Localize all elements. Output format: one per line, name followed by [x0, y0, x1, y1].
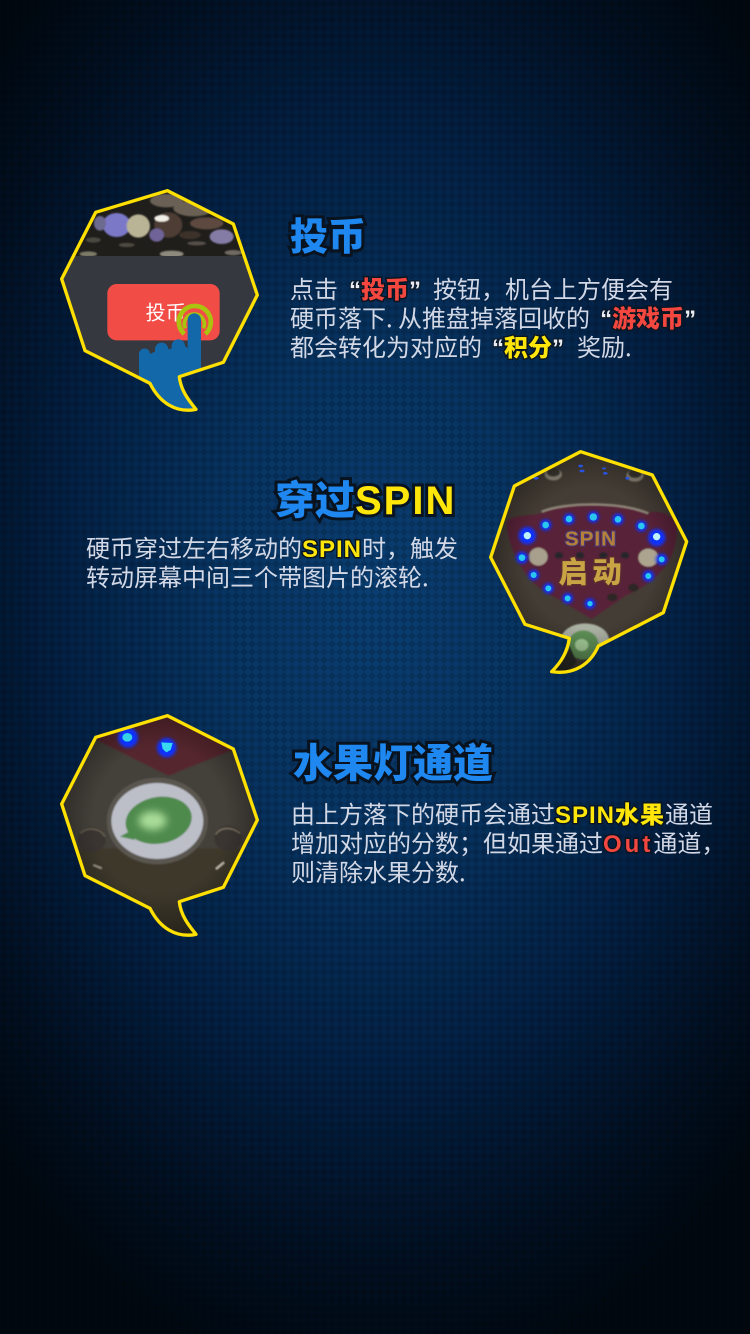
text block: 投币 description: [290, 270, 696, 363]
text block: SPIN description: 转动屏幕中间三个带图片的滚轮.: [86, 558, 429, 593]
bubble 3: fruit lamp photo: [60, 714, 259, 937]
text block: 投币 description: 硬币落下. 从推盘掉落回收的 “游戏币”: [290, 299, 696, 334]
bubble outline: [491, 452, 687, 672]
bubble 1: coin button illustration: [60, 189, 259, 412]
heading: 水果灯通道: 水果灯通道: [293, 742, 493, 786]
bubble outline: [62, 191, 257, 410]
heading: 投币: 投币: [290, 217, 366, 259]
button label: 投币: [146, 296, 186, 325]
SPIN board lettering: SPIN: [565, 528, 617, 551]
icon: pointing hand: [139, 313, 201, 408]
photo: lime lamp channel: [78, 718, 242, 934]
text block: 投币 description: 都会转化为对应的 “积分” 奖励.: [290, 328, 632, 363]
text block: 投币 description: 点击 “投币” 按钮，机台上方便会有: [290, 270, 673, 305]
bubble outline: [62, 716, 257, 935]
text block: fruit lamp description: 则清除水果分数.: [291, 853, 466, 888]
blue LEDs: [516, 465, 667, 609]
photo: red SPIN board: 启动: [558, 549, 626, 591]
panel: dark screen: [50, 180, 270, 420]
text block: fruit lamp description: 由上方落下的硬币会通过SPIN水果通道: [291, 795, 713, 830]
text block: SPIN description: [86, 529, 458, 593]
blue LEDs: [118, 728, 176, 757]
bubble 2: SPIN board photo: [489, 450, 688, 674]
text block: fruit lamp description: [291, 795, 725, 888]
tap rings: [179, 306, 211, 334]
heading: 穿过SPIN: 穿过SPIN: [275, 479, 456, 523]
red button: [107, 284, 220, 340]
text block: SPIN description: 硬币穿过左右移动的SPIN时，触发: [86, 529, 458, 564]
text block: fruit lamp description: 增加对应的分数；但如果通过Out通道，: [291, 824, 725, 859]
photo: red SPIN board: [506, 468, 677, 673]
photo: pile of coins: [76, 192, 242, 256]
